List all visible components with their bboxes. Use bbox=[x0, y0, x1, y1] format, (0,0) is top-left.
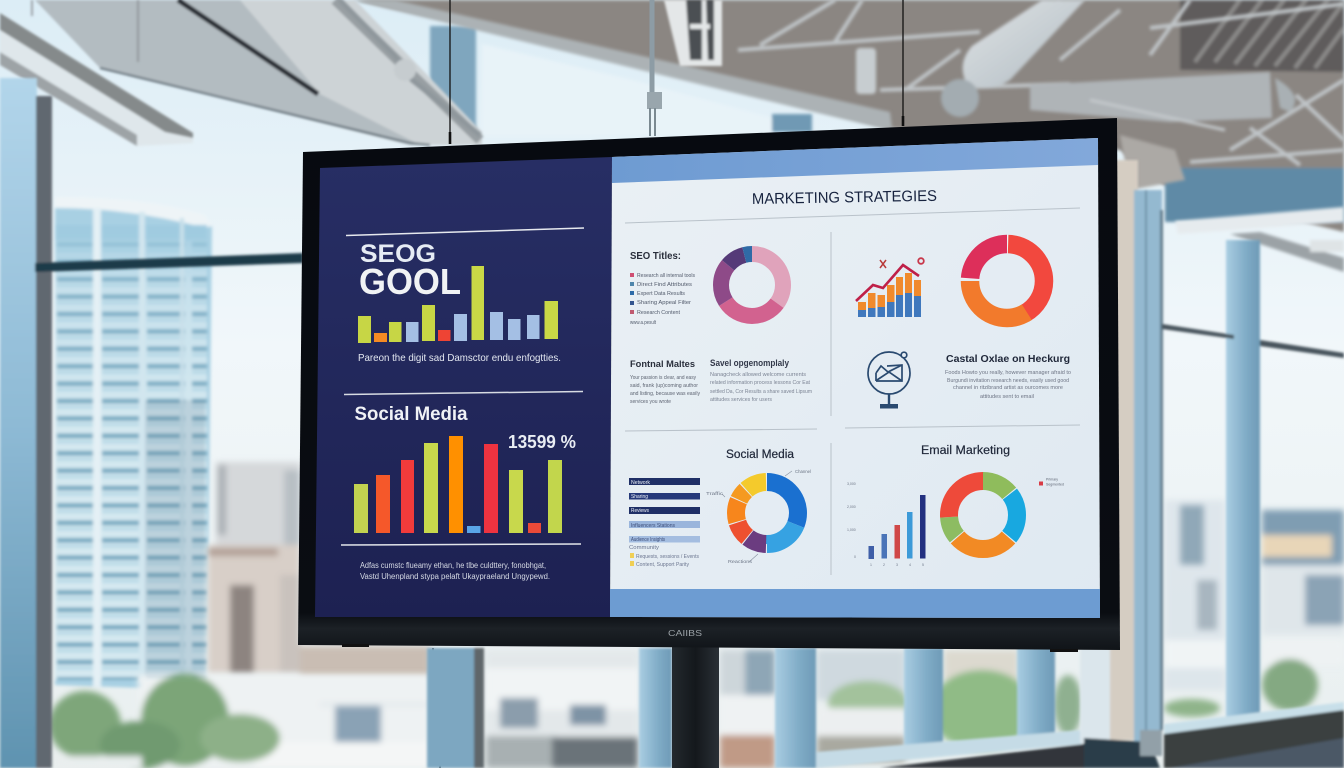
bar chart: email marketing: 1 bbox=[870, 563, 872, 567]
right light panel bbox=[610, 138, 1100, 618]
bar chart: email marketing bbox=[847, 482, 926, 567]
bar chart: SEO goal bbox=[358, 266, 558, 343]
text block: Fontnal Maltes: services you wrote bbox=[630, 399, 671, 405]
mid-distance buildings bbox=[208, 462, 430, 676]
left dark panel bbox=[315, 157, 612, 617]
donut labels: social media: Traffic bbox=[706, 491, 724, 496]
text block: Savel opgenomplaly bbox=[710, 358, 812, 403]
bar chart: social media bbox=[354, 436, 562, 533]
metric value: 13599 % bbox=[508, 431, 576, 452]
text block: Castal Oxlae on Heckurg: Burgundi invitation research needs, easily used good bbox=[947, 378, 1069, 384]
list: social media channels: Content, Support Parity bbox=[636, 562, 689, 568]
stand pole bbox=[672, 640, 719, 768]
upper ceiling with ducts and trusses bbox=[0, 0, 1344, 272]
caption: social media bbox=[360, 561, 550, 581]
title: MARKETING STRATEGIES bbox=[752, 188, 937, 208]
text block: Savel opgenomplaly: attitudes services for users bbox=[710, 397, 772, 403]
monitor bezel bbox=[298, 118, 1120, 652]
section: SEO titles list: Direct Find Attributes bbox=[637, 282, 692, 288]
bar chart: email marketing: 0 bbox=[854, 555, 856, 559]
text block: Fontnal Maltes: said, frank (up)coming author bbox=[630, 383, 698, 389]
donut labels: social media bbox=[706, 469, 811, 564]
heading: SEOG GOOL: SEOG bbox=[360, 240, 436, 268]
text block: Fontnal Maltes: and listing, because was easily bbox=[630, 391, 700, 397]
text block: Castal Oxlae on Heckurg: Castal Oxlae on Heckurg bbox=[946, 353, 1070, 365]
caption: social media: Vastd Uhenpland stypa pelaft Ukaypraeland Ungypewd. bbox=[360, 572, 550, 581]
mounting pole and cables bbox=[433, 0, 903, 768]
bar chart: email marketing: 1,000 bbox=[847, 528, 856, 532]
icon: email on a stand bbox=[868, 352, 910, 408]
bottom colour band bbox=[610, 589, 1100, 618]
legend: email marketing: Primary bbox=[1046, 478, 1058, 482]
section: SEO titles list: Research Content bbox=[637, 310, 680, 316]
list: social media channels: Sharing bbox=[631, 494, 648, 500]
section: SEO titles list: Expert Data Results bbox=[637, 291, 685, 297]
foreground buildings and trees bbox=[49, 500, 1344, 768]
legend: email marketing bbox=[1039, 478, 1064, 486]
text block: Fontnal Maltes bbox=[630, 359, 700, 405]
donut chart: SEO titles bbox=[721, 254, 783, 316]
list: social media channels: Network bbox=[631, 480, 651, 486]
brand label: CAIIBS bbox=[668, 629, 702, 638]
icon: rising area chart bbox=[856, 258, 924, 317]
list: social media channels: Community bbox=[629, 545, 660, 551]
donut labels: social media: Channel bbox=[795, 469, 811, 474]
top colour band bbox=[612, 138, 1098, 183]
text block: Savel opgenomplaly: settled Da, Cor Results a share saved Lipsum bbox=[710, 389, 812, 395]
bar chart: email marketing: 4 bbox=[909, 563, 911, 567]
section: SEO titles list: www.a.pesult bbox=[629, 320, 656, 326]
heading: Email Marketing: Email Marketing bbox=[921, 445, 1010, 457]
truss and duct, right bbox=[738, 0, 1344, 272]
section: SEO titles list: Sharing Appeal Filter bbox=[637, 300, 691, 306]
text block: Fontnal Maltes: Your passion is clear, and easy bbox=[630, 375, 696, 381]
caption: social media: Adfas cumstc flueamy ethan, he tlbe culdttery, fonobhgat, bbox=[360, 561, 546, 570]
text block: Castal Oxlae on Heckurg bbox=[945, 353, 1071, 400]
text block: Castal Oxlae on Heckurg: channel in ritzibrand artist as ourcomes more bbox=[953, 385, 1063, 391]
text block: Fontnal Maltes: Fontnal Maltes bbox=[630, 359, 695, 370]
text block: Savel opgenomplaly: Savel opgenomplaly bbox=[710, 358, 790, 369]
distant glass tower bbox=[55, 197, 212, 690]
heading: SEOG GOOL: GOOL bbox=[359, 261, 461, 302]
list: social media channels: Requests, sessions / Events bbox=[636, 554, 699, 560]
list: social media channels: Reviews bbox=[631, 508, 649, 514]
section: SEO titles list: SEO Titles: bbox=[630, 251, 681, 262]
ceiling beam bbox=[352, 0, 892, 128]
bar chart: email marketing: 5 bbox=[922, 563, 924, 567]
donut chart: social media bbox=[736, 482, 798, 544]
donut chart: email marketing bbox=[949, 481, 1017, 549]
heading: SEOG GOOL bbox=[359, 240, 461, 302]
caption: SEO goal: Pareon the digit sad Damsctor endu enfogtties. bbox=[358, 352, 561, 364]
bar chart: email marketing: 2 bbox=[883, 563, 885, 567]
bar chart: email marketing: 2,000 bbox=[847, 505, 856, 509]
text block: Castal Oxlae on Heckurg: attitudes sent to email bbox=[980, 394, 1034, 400]
bar chart: email marketing: 3 bbox=[896, 563, 898, 567]
text block: Savel opgenomplaly: Nanagcheck allowed welcome currents bbox=[710, 372, 806, 378]
bar chart: email marketing: 3,000 bbox=[847, 482, 856, 486]
soffit panel, left bbox=[35, 0, 482, 145]
list: social media channels: Influencers Stations bbox=[631, 523, 675, 529]
section: SEO titles list: Research all internal tools bbox=[637, 273, 695, 279]
air vent box bbox=[664, 0, 722, 66]
suspended light, left bbox=[0, 0, 193, 146]
list: social media channels: Audience Insights bbox=[631, 537, 665, 543]
heading: Social Media chart: Social Media bbox=[726, 449, 795, 461]
donut labels: social media: Reactions bbox=[728, 559, 753, 564]
text block: Castal Oxlae on Heckurg: Foods Howto you really, however manager afraid to bbox=[945, 370, 1071, 376]
donut chart: revenue split bbox=[970, 244, 1044, 318]
list: social media channels bbox=[629, 478, 700, 568]
heading: Social Media: Social Media bbox=[354, 404, 468, 425]
section: SEO titles list bbox=[629, 251, 695, 326]
text block: Savel opgenomplaly: related information process lessons Cor Eat bbox=[710, 380, 810, 386]
legend: email marketing: Segmented bbox=[1046, 482, 1064, 486]
